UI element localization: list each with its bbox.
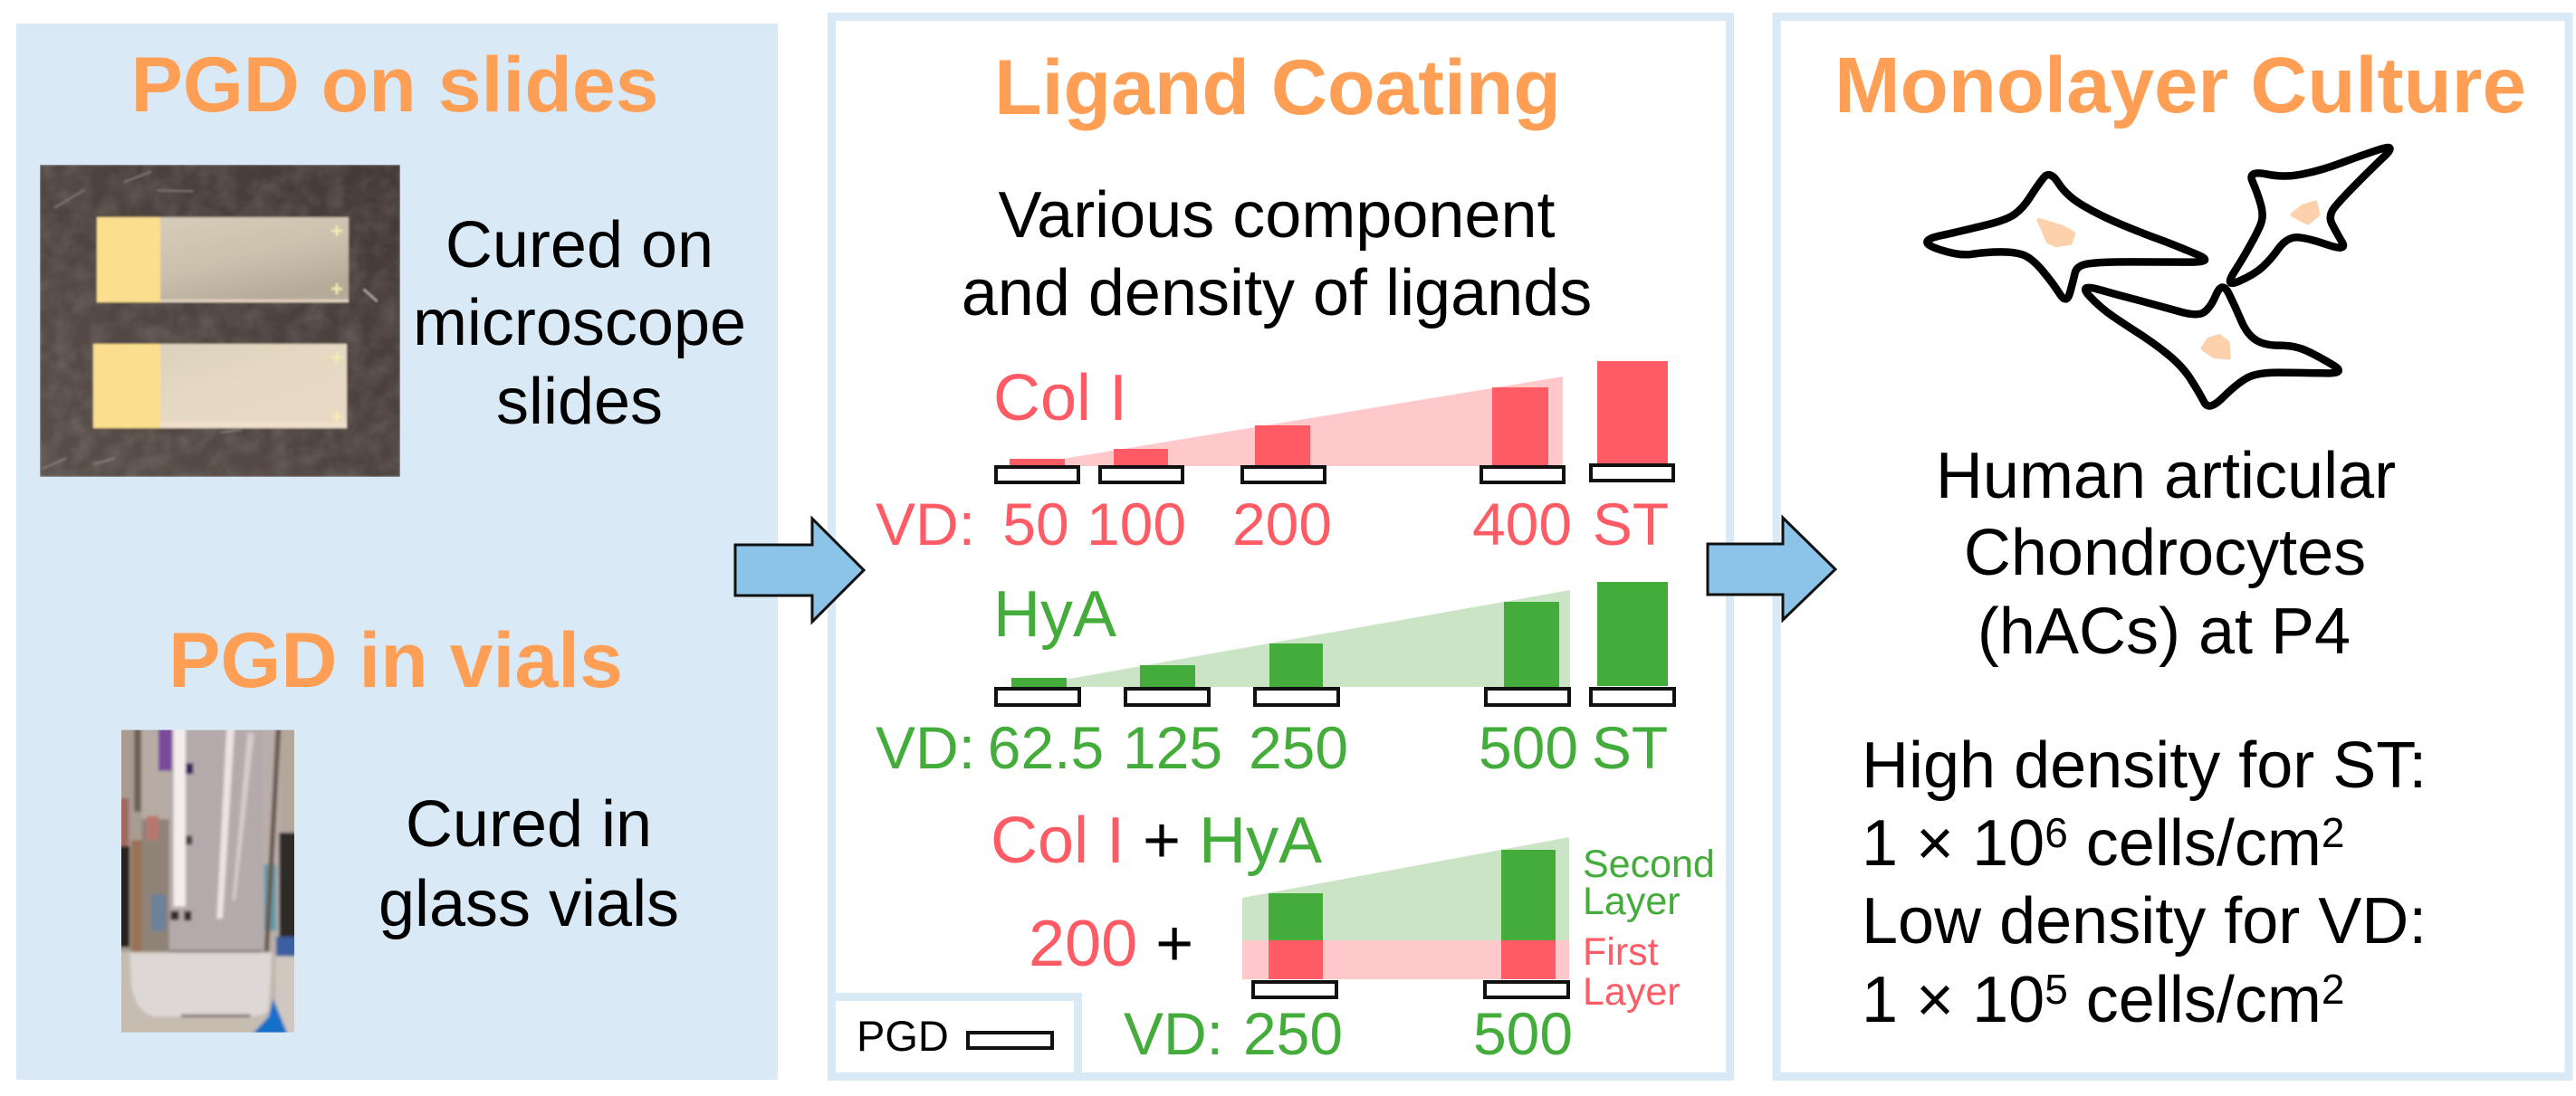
text: cured in glass vials [378,788,679,940]
labels: collagen VD values: ST [1593,491,1669,558]
photo: PGD cured on microscope slides [40,165,400,477]
heading: Ligand Coating: Ligand Coating [994,44,1561,131]
labels: hyaluronic acid VD values: 62.5 [988,714,1104,781]
label: HyA: HyA [993,578,1116,651]
text: various component and density of ligands: Various component [998,179,1556,252]
heading: Monolayer Culture: Monolayer Culture [1834,42,2526,129]
chart: hyaluronic acid density bars [996,582,1674,705]
labels: hyaluronic acid VD values: ST [1592,714,1668,781]
text: human articular chondrocytes: Human articular [1936,440,2396,512]
labels: collagen VD values: 100 [1087,491,1186,558]
text: cured on microscope slides: Cured on [445,209,713,281]
text: high density for ST: 1 × 10 [1862,807,2045,880]
chart: collagen I density bars [996,361,1673,482]
panel: ligand coating [831,16,1729,1077]
label: first layer: Layer [1583,970,1681,1014]
labels: collagen VD values: 400 [1472,491,1572,558]
text: low density for VD: Low density for VD: [1862,885,2427,958]
text: human articular chondrocytes: (hACs) at P4 [1977,596,2351,668]
photo: PGD cured in glass vial [121,729,294,1033]
label: Col I: Col I [993,362,1127,434]
heading: PGD in vials: PGD in vials [168,617,623,704]
legend: PGD: PGD [857,1012,949,1060]
labels: hyaluronic acid VD values: 500 [1479,714,1578,781]
text: low density for VD: 1 × 10 [1862,964,2045,1036]
panel: PGD preparation [16,24,778,1080]
heading: PGD on slides: PGD on slides [130,42,659,129]
labels: hyaluronic acid VD values: 125 [1123,714,1222,781]
icon: chondrocyte cells [1927,148,2390,405]
labels: bilayer VD values: VD: [1124,1000,1223,1067]
text: low density for VD: cells/cm [2068,964,2322,1036]
labels: collagen VD values: 50 [1002,491,1069,558]
text: various component and density of ligands: and density of ligands [962,257,1592,329]
text: high density for ST: High density for ST: [1862,729,2427,802]
label: second layer: Layer [1583,880,1681,923]
panel: monolayer culture [1776,16,2569,1077]
label: Col I + HyA: Col I + HyA [991,805,1322,877]
chart: bilayer coating bars [1242,837,1569,997]
labels: collagen VD values: 200 [1232,491,1332,558]
text: human articular chondrocytes: Chondrocytes [1964,517,2366,589]
arrow: ligand coating to monolayer culture [1708,518,1835,620]
text: various component and density of ligands [962,179,1592,329]
labels: hyaluronic acid VD values: VD: [876,714,975,781]
text: low density for VD: 5 [2045,966,2068,1013]
text: human articular chondrocytes [1936,440,2396,668]
text: low density for VD: 2 [2322,966,2344,1013]
legend: PGD [831,997,1077,1077]
labels: bilayer VD values [1124,1000,1573,1067]
text: cured in glass vials: Cured in [406,788,652,861]
text: low density for VD [1862,885,2427,1036]
labels: bilayer VD values: 250 [1243,1000,1343,1067]
text: high density for ST: cells/cm [2068,807,2322,880]
label: second layer [1583,843,1715,923]
labels: hyaluronic acid VD values [876,714,1668,781]
label: first layer [1583,930,1681,1014]
labels: hyaluronic acid VD values: 250 [1249,714,1348,781]
labels: bilayer VD values: 500 [1473,1000,1573,1067]
text: cured on microscope slides [413,209,746,438]
arrow: PGD to ligand coating [735,519,864,622]
text: cured on microscope slides: slides [496,366,663,438]
text: cured in glass vials: glass vials [378,868,679,940]
labels: collagen VD values: VD: [876,491,975,558]
labels: collagen VD values [876,491,1669,558]
label: second layer: Second [1583,843,1715,886]
text: high density for ST: 2 [2322,809,2344,856]
label: first layer: First [1583,930,1659,974]
text: high density for ST [1862,729,2427,880]
label: 200 +: 200 + [1029,908,1193,980]
text: high density for ST: 6 [2045,809,2068,856]
text: cured on microscope slides: microscope [413,287,746,359]
